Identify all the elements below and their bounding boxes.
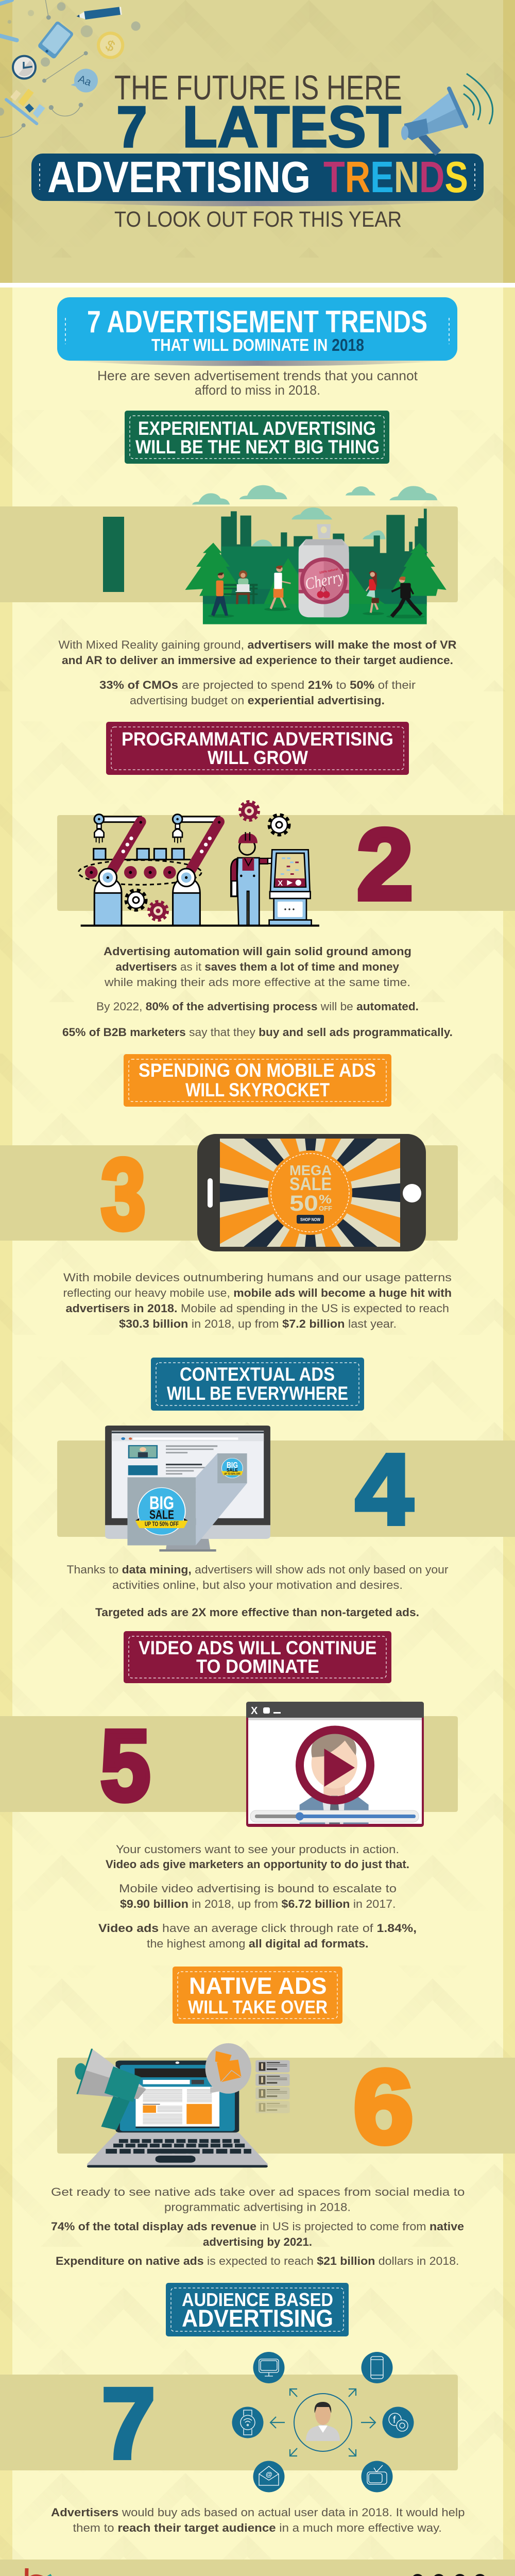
body text trend 1 [59, 638, 457, 707]
logo: branex [26, 2568, 128, 2576]
body text trend 6: Get ready to see native ads take over ad spaces from social media to [51, 2185, 465, 2198]
heading: audience based advertising: ADVERTISING [182, 2304, 333, 2332]
body text trend 3: With mobile devices outnumbering humans and our usage patterns [63, 1271, 452, 1284]
intro text: Here are seven advertisement trends that you cannot [97, 368, 418, 383]
heading: experiential advertising [125, 411, 389, 464]
can label text: 100% natural [319, 568, 338, 575]
heading: native ads: NATIVE ADS [189, 1973, 327, 1999]
heading: spending on mobile ads: SPENDING ON MOBILE ADS [139, 1060, 376, 1081]
banner: 7 advertisement trends: 7 ADVERTISEMENT TRENDS [87, 304, 427, 339]
channel icon: email [253, 2461, 284, 2493]
body text trend 5: Video ads give marketers an opportunity to do just that. [106, 1858, 409, 1871]
channel icon: email: @ [266, 2470, 272, 2478]
icon: pencil [77, 7, 122, 20]
heading: native ads [173, 1967, 342, 2024]
title line 2: LATEST [182, 94, 401, 159]
pill: advertising trends [31, 153, 484, 206]
body text trend 6: 74% of the total display ads revenue in US is projected to come from native [51, 2220, 464, 2233]
bench with woman and laptop [224, 570, 258, 604]
body text trend 7: them to reach their target audience in a much more effective way. [73, 2521, 442, 2534]
illustration: park with giant cherry can [185, 485, 447, 624]
body text trend 4: activities online, but also your motivation and desires. [112, 1579, 403, 1591]
icon: bar chart [6, 89, 45, 124]
channel icon: social apps: f [393, 2415, 396, 2426]
panel: trend 5 video ads [0, 1631, 458, 1950]
title line 3: TO LOOK OUT FOR THIS YEAR [114, 207, 402, 232]
pill: advertising trends: ADVERTISING [47, 153, 311, 202]
illustration: video player window [246, 1702, 424, 1827]
person: orange shirt [208, 572, 234, 618]
body text trend 5: the highest among all digital ad formats. [147, 1937, 369, 1950]
heading: programmatic advertising: WILL GROW [208, 747, 308, 768]
kiosk terminal: X [278, 879, 283, 888]
body text trend 2: while making their ads more effective at the same time. [104, 976, 410, 989]
number 1: 1 [105, 532, 122, 601]
body text trend 2: advertisers as it saves them a lot of time and money [115, 960, 400, 973]
number 4: 4 [355, 1433, 413, 1546]
channel icon: television [362, 2461, 392, 2493]
clouds [192, 485, 437, 546]
native ad cards [255, 2060, 290, 2113]
person: woman in red [363, 571, 384, 615]
title line 2: 7 [116, 94, 147, 159]
heading: video ads: TO DOMINATE [196, 1656, 319, 1677]
body text trend 1: With Mixed Reality gaining ground, advertisers will make the most of VR [59, 638, 457, 651]
band [57, 1440, 515, 1537]
body text trend 3: $30.3 billion in 2018, up from $7.2 billion last year. [119, 1317, 397, 1330]
body text trend 2 [62, 945, 453, 1039]
icon: megaphone [401, 74, 493, 153]
body text trend 1: advertising budget on experiential advertising. [130, 694, 385, 707]
illustration: phone with mega sale ad: MEGA [289, 1162, 332, 1178]
number 6: 6 [353, 2048, 414, 2165]
heading: video ads [124, 1631, 391, 1683]
footer [0, 2560, 515, 2576]
illustration: robot assembly line [78, 815, 319, 926]
heading: experiential advertising: WILL BE THE NEXT BIG THING [135, 436, 380, 457]
body text trend 4: Thanks to data mining, advertisers will show ads not only based on your [67, 1563, 448, 1576]
heading: contextual ads: CONTEXTUAL ADS [180, 1364, 335, 1385]
megaphone [75, 2063, 87, 2080]
icon: tablet [37, 21, 74, 59]
body text trend 6: advertising by 2021. [203, 2235, 312, 2248]
panel: trend 2 programmatic advertising [57, 722, 515, 1039]
illustration: phone with mega sale ad: SHOP NOW [300, 1217, 320, 1222]
icon: coin [97, 31, 124, 59]
body text trend 5: Your customers want to see your products in action. [116, 1843, 399, 1856]
band [57, 2058, 515, 2154]
trees [185, 543, 447, 604]
heading: video ads: VIDEO ADS WILL CONTINUE [139, 1637, 377, 1658]
channel icon: desktop [253, 2352, 284, 2383]
panel: trend 6 native ads [51, 1967, 515, 2267]
person: running man in black [386, 577, 425, 618]
panel: trend 7 audience based advertising [0, 2283, 465, 2534]
body text trend 5: Mobile video advertising is bound to escalate to [119, 1882, 397, 1895]
diagram: audience channels [232, 2352, 414, 2493]
illustration: phone with mega sale ad [197, 1134, 426, 1251]
heading: programmatic advertising: PROGRAMMATIC ADVERTISING [122, 728, 393, 750]
robot arm 2 [173, 815, 220, 926]
decorative marketing icons top left [0, 0, 141, 138]
title line 1: THE FUTURE IS HERE [114, 69, 402, 107]
ad labels [145, 1461, 241, 1528]
body text trend 3 [63, 1271, 452, 1330]
body text trend 3: advertisers in 2018. Mobile ad spending in the US is expected to reach [66, 1302, 449, 1315]
can label text: Cherry [303, 567, 346, 593]
band [57, 815, 515, 911]
band [0, 506, 458, 602]
body text trend 5: $9.90 billion in 2018, up from $6.72 billion in 2017. [120, 1897, 396, 1910]
header panel [0, 0, 493, 232]
pill: advertising trends: TRENDS [323, 153, 468, 202]
heading: audience based advertising [166, 2283, 349, 2336]
grass [203, 604, 427, 624]
band [0, 2375, 458, 2470]
intro text: afford to miss in 2018. [195, 382, 320, 398]
number 2: 2 [357, 808, 413, 921]
skyline [221, 509, 427, 606]
audience person [294, 2394, 352, 2451]
intro text [97, 368, 418, 398]
illustration: phone with mega sale ad: OFF [319, 1205, 332, 1212]
body text trend 3: reflecting our heavy mobile use, mobile ads will become a huge hit with [63, 1286, 452, 1299]
gears [126, 802, 289, 920]
ad labels: SALE [149, 1508, 174, 1522]
body text trend 4: Targeted ads are 2X more effective than non-targeted ads. [95, 1606, 419, 1619]
panel: intro [57, 297, 457, 398]
number 7: 7 [101, 2367, 156, 2480]
body text trend 1: 33% of CMOs are projected to spend 21% to 50% of their [99, 679, 416, 691]
giant can [299, 524, 349, 617]
body text trend 5 [98, 1843, 417, 1950]
band [0, 1716, 458, 1812]
panel: trend 4 contextual ads [57, 1358, 515, 1619]
body text trend 2: By 2022, 80% of the advertising process will be automated. [96, 1000, 419, 1013]
ad labels: SALE [227, 1467, 238, 1472]
ad labels: UP TO 50% OFF [145, 1520, 179, 1528]
heading: contextual ads [151, 1358, 364, 1411]
worker [231, 832, 282, 926]
icon: speech bubble Aa: Aa [77, 73, 93, 89]
person: white shirt [264, 566, 291, 611]
banner: 7 advertisement trends: THAT WILL DOMINATE IN 2018 [151, 335, 364, 354]
illustration: laptop with megaphone [75, 2043, 290, 2167]
illustration: phone with mega sale ad: % [319, 1193, 332, 1207]
body text trend 1: and AR to deliver an immersive ad experience to their target audience. [62, 654, 453, 667]
icon: speech bubble Aa [71, 69, 98, 92]
speech bubble with envelopes [210, 2087, 236, 2093]
arrows [270, 2389, 375, 2456]
body text trend 7 [51, 2506, 465, 2534]
illustration: phone with mega sale ad: 50 [289, 1191, 318, 1216]
banner: 7 advertisement trends [57, 297, 457, 366]
body text trend 6 [51, 2185, 465, 2267]
heading: spending on mobile ads [124, 1054, 391, 1107]
icon: coin: $ [103, 37, 117, 55]
channel icon: social apps [382, 2407, 414, 2438]
heading: experiential advertising: EXPERIENTIAL ADVERTISING [138, 418, 376, 439]
heading: audience based advertising: AUDIENCE BASED [182, 2289, 333, 2310]
number 5: 5 [100, 1709, 150, 1822]
illustration: monitor with contextual ad [105, 1426, 270, 1552]
icon: clock [13, 56, 37, 80]
illustration: video player window: X [251, 1705, 258, 1717]
body text trend 4 [67, 1563, 448, 1619]
number 1 [103, 517, 124, 601]
robot arm 1 [94, 815, 142, 926]
body text trend 6: programmatic advertising in 2018. [164, 2201, 351, 2213]
illustration: phone with mega sale ad: SALE [289, 1174, 332, 1194]
heading: programmatic advertising [106, 722, 409, 775]
body text trend 2: 65% of B2B marketers say that they buy and sell ads programmatically. [62, 1026, 453, 1039]
body text trend 2: Advertising automation will gain solid ground among [104, 945, 411, 958]
body text trend 5: Video ads have an average click through rate of 1.84%, [98, 1922, 417, 1935]
channel icon: smartwatch [232, 2407, 264, 2438]
kiosk terminal [269, 850, 312, 926]
body text trend 6: Expenditure on native ads is expected to reach $21 billion dollars in 2018. [56, 2255, 459, 2267]
ad labels: UP TO 50% OFF [224, 1472, 241, 1476]
heading: spending on mobile ads: WILL SKYROCKET [185, 1079, 330, 1100]
body text trend 7: Advertisers would buy ads based on actual user data in 2018. It would help [51, 2506, 465, 2519]
keys [119, 2136, 240, 2146]
heading: contextual ads: WILL BE EVERYWHERE [167, 1383, 348, 1404]
band [0, 1145, 458, 1241]
social icons [411, 2574, 486, 2576]
panel: trend 1 experiential advertising [0, 411, 458, 707]
ad labels: BIG [227, 1461, 238, 1470]
number 3: 3 [101, 1138, 146, 1250]
ad labels: BIG [149, 1493, 174, 1513]
channel icon: smartphone [362, 2352, 392, 2383]
heading: native ads: WILL TAKE OVER [188, 1996, 328, 2018]
panel: trend 3 mobile ads [0, 1054, 458, 1330]
